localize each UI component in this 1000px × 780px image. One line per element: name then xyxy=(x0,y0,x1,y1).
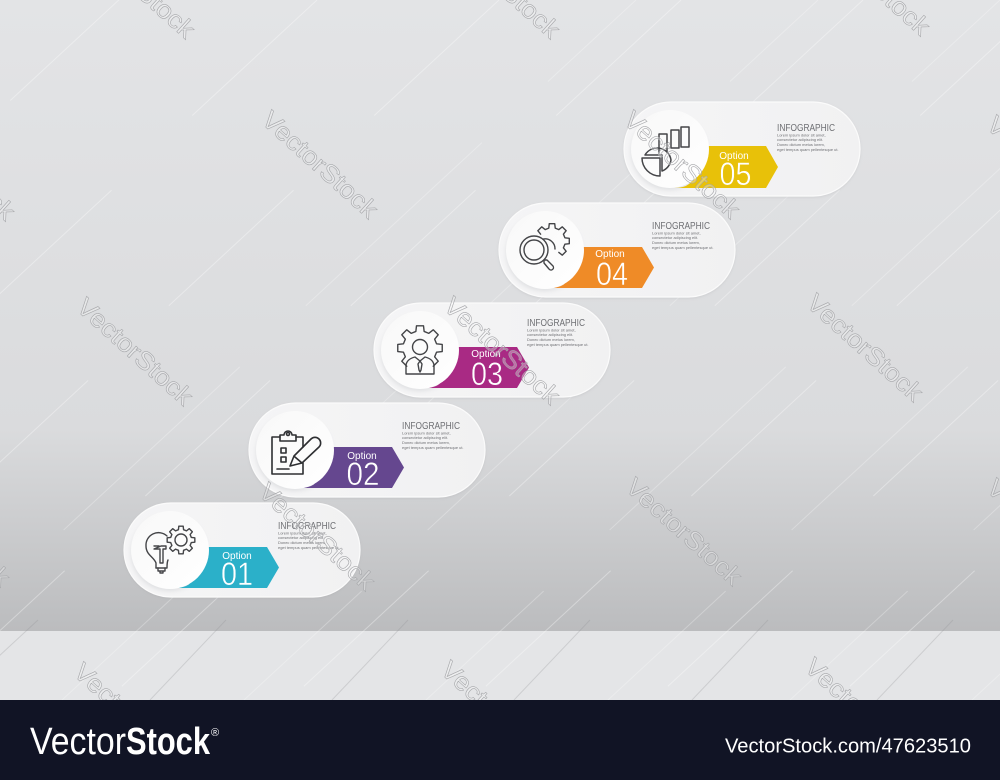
description: Donec dictum metus lorem, xyxy=(278,540,326,545)
icon: gear with person xyxy=(398,326,442,374)
description xyxy=(278,530,340,550)
description: consectetur adipiscing elit. xyxy=(527,332,573,337)
panel: option 02 xyxy=(249,403,485,497)
description: Lorem ipsum dolor sit amet, xyxy=(777,132,826,138)
ribbon arrow xyxy=(549,247,654,288)
number: 02 xyxy=(346,456,380,492)
watermark pattern: VectorStock xyxy=(68,658,196,777)
option label: Option xyxy=(595,249,625,260)
description: eget tempus quam pellentesque ut. xyxy=(652,245,714,250)
footer bar xyxy=(0,700,1000,780)
option label: Option xyxy=(719,151,749,162)
description xyxy=(652,230,714,250)
watermark pattern: VectorStock xyxy=(799,653,927,772)
watermark pattern: VectorStock xyxy=(435,656,563,775)
icon: clipboard and pencil xyxy=(272,431,321,474)
watermark pattern: VectorStock xyxy=(438,292,566,411)
description: Lorem ipsum dolor sit amet, xyxy=(652,230,701,236)
description: consectetur adipiscing elit. xyxy=(402,435,448,440)
number: 01 xyxy=(221,556,253,592)
description: eget tempus quam pellentesque ut. xyxy=(777,147,839,152)
heading: INFOGRAPHIC xyxy=(652,221,710,232)
pill background xyxy=(499,203,735,297)
panel: option 01 xyxy=(124,503,360,597)
icon: bulb and gear xyxy=(146,526,195,573)
heading: INFOGRAPHIC xyxy=(527,318,585,329)
description: Donec dictum metus lorem, xyxy=(402,440,450,445)
pill background xyxy=(624,102,860,196)
number: 03 xyxy=(471,356,503,392)
panel: option 03 xyxy=(374,303,610,397)
ribbon arrow xyxy=(174,547,279,588)
registered mark: ® xyxy=(211,727,219,739)
description: Donec dictum metus lorem, xyxy=(777,142,825,147)
floor band xyxy=(0,631,1000,700)
ribbon arrow xyxy=(674,146,778,188)
ribbon arrow xyxy=(424,347,529,388)
description: consectetur adipiscing elit. xyxy=(652,235,698,240)
panel: option 05 xyxy=(624,102,860,196)
option label: Option xyxy=(347,451,377,462)
description: Lorem ipsum dolor sit amet, xyxy=(402,430,451,436)
description: eget tempus quam pellentesque ut. xyxy=(527,342,589,347)
description: Donec dictum metus lorem, xyxy=(527,337,575,342)
watermark pattern: VectorStock xyxy=(253,478,381,597)
watermark pattern: VectorStock xyxy=(256,106,384,225)
heading: INFOGRAPHIC xyxy=(402,421,460,432)
pill background xyxy=(124,503,360,597)
description xyxy=(402,430,464,450)
ribbon arrow xyxy=(299,447,404,488)
description: eget tempus quam pellentesque ut. xyxy=(278,545,340,550)
number: 04 xyxy=(596,256,628,292)
pill background xyxy=(249,403,485,497)
footer id: VectorStock.com/47623510 xyxy=(725,736,971,758)
icon: charts xyxy=(642,127,689,176)
heading: INFOGRAPHIC xyxy=(777,123,835,134)
description: Lorem ipsum dolor sit amet, xyxy=(278,530,327,536)
description: consectetur adipiscing elit. xyxy=(278,535,324,540)
icon: gear with magnifier xyxy=(520,224,569,270)
description: Donec dictum metus lorem, xyxy=(652,240,700,245)
watermark pattern: VectorStock xyxy=(618,106,746,225)
description: eget tempus quam pellentesque ut. xyxy=(402,445,464,450)
number: 05 xyxy=(720,156,752,192)
watermark pattern: VectorStock xyxy=(801,289,929,408)
watermark pattern: VectorStock xyxy=(620,473,748,592)
footer logo: VectorStock xyxy=(30,721,211,763)
option label: Option xyxy=(222,551,252,562)
panel: option 04 xyxy=(499,203,735,297)
description: consectetur adipiscing elit. xyxy=(777,137,823,142)
pill background xyxy=(374,303,610,397)
heading: INFOGRAPHIC xyxy=(278,521,336,532)
description xyxy=(777,132,839,152)
option label: Option xyxy=(471,349,501,360)
description xyxy=(527,328,589,347)
watermark pattern: VectorStock xyxy=(71,293,199,412)
description: Lorem ipsum dolor sit amet, xyxy=(527,328,576,332)
